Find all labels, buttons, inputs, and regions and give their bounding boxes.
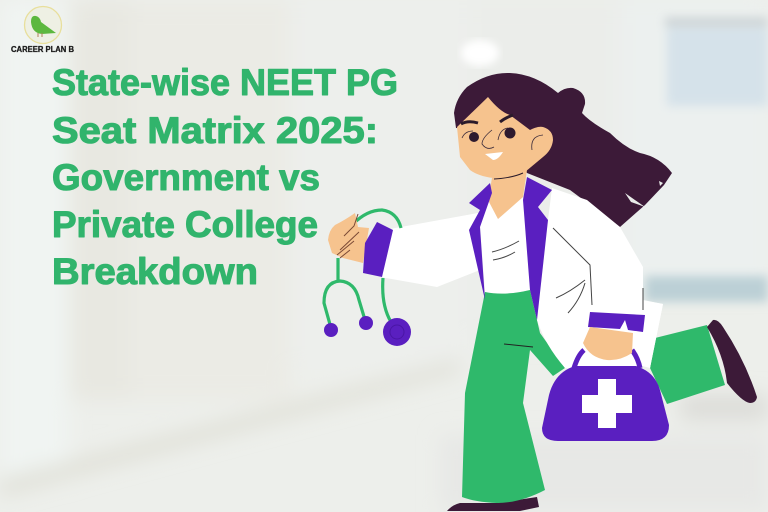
lab coat back panel <box>625 300 663 368</box>
title: Seat Matrix 2025: <box>52 110 378 151</box>
face <box>457 97 553 179</box>
back leg and shoe <box>650 320 757 404</box>
green trousers <box>462 290 565 503</box>
purple lapels <box>523 177 552 320</box>
title: Breakdown <box>52 251 258 292</box>
hand holding stethoscope <box>328 213 369 263</box>
icon: green bird <box>31 16 56 34</box>
icon: white medical cross <box>582 379 632 428</box>
lab coat <box>537 188 663 372</box>
sleeve cuff <box>588 312 645 332</box>
illustration: running doctor <box>324 73 757 511</box>
title <box>52 62 398 292</box>
neck <box>488 170 527 219</box>
title: Government vs <box>52 157 320 198</box>
stethoscope <box>324 210 411 346</box>
hair <box>454 73 672 227</box>
front shoe <box>447 497 539 511</box>
title: State-wise NEET PG <box>52 62 398 103</box>
title: Private College <box>52 204 318 245</box>
logo wordmark: CAREER PLAN B <box>11 45 74 54</box>
doctor's bag <box>542 327 669 441</box>
white shirt <box>480 197 530 294</box>
purple cuff <box>363 222 393 277</box>
outstretched arm sleeve <box>380 213 480 287</box>
logo: Career Plan B <box>11 6 74 54</box>
